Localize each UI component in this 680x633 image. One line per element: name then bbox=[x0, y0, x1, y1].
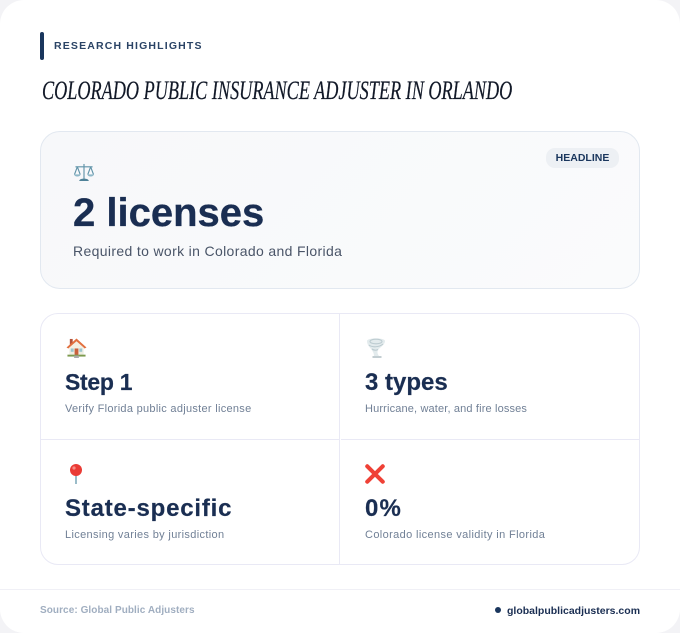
description: Verify Florida public adjuster license bbox=[65, 403, 252, 415]
description: Colorado license validity in Florida bbox=[365, 529, 545, 541]
value: Step 1 bbox=[65, 369, 132, 395]
value: 3 types bbox=[365, 369, 448, 396]
icon: round pushpin bbox=[70, 464, 82, 484]
eyebrow label: RESEARCH HIGHLIGHTS bbox=[54, 40, 203, 52]
headline description: Required to work in Colorado and Florida bbox=[73, 243, 342, 259]
icon: balance scale bbox=[74, 164, 94, 181]
title: COLORADO PUBLIC INSURANCE ADJUSTER IN ORLANDO bbox=[42, 76, 512, 105]
badge: headline bbox=[546, 148, 619, 168]
description: Hurricane, water, and fire losses bbox=[365, 403, 527, 415]
stat: 0 percent bbox=[365, 464, 545, 541]
value: 0% bbox=[365, 495, 402, 522]
icon: tornado bbox=[367, 338, 385, 358]
description: Licensing varies by jurisdiction bbox=[65, 529, 224, 541]
accent bar bbox=[40, 32, 44, 60]
headline value: 2 licenses bbox=[73, 191, 264, 235]
icon: cross mark bbox=[365, 464, 385, 484]
source: Source: Global Public Adjusters bbox=[40, 605, 195, 616]
value: State-specific bbox=[65, 495, 232, 522]
stat: step 1 bbox=[41, 314, 340, 440]
stat: state-specific bbox=[41, 440, 340, 564]
stat: 3 types bbox=[341, 314, 639, 440]
icon: house bbox=[66, 338, 86, 358]
footer bbox=[0, 589, 680, 633]
brand url: globalpublicadjusters.com bbox=[507, 605, 640, 617]
panel: headline stat bbox=[40, 131, 640, 289]
panel: stat grid bbox=[40, 313, 640, 565]
brand dot bbox=[495, 607, 501, 613]
badge: headline: HEADLINE bbox=[556, 152, 609, 164]
